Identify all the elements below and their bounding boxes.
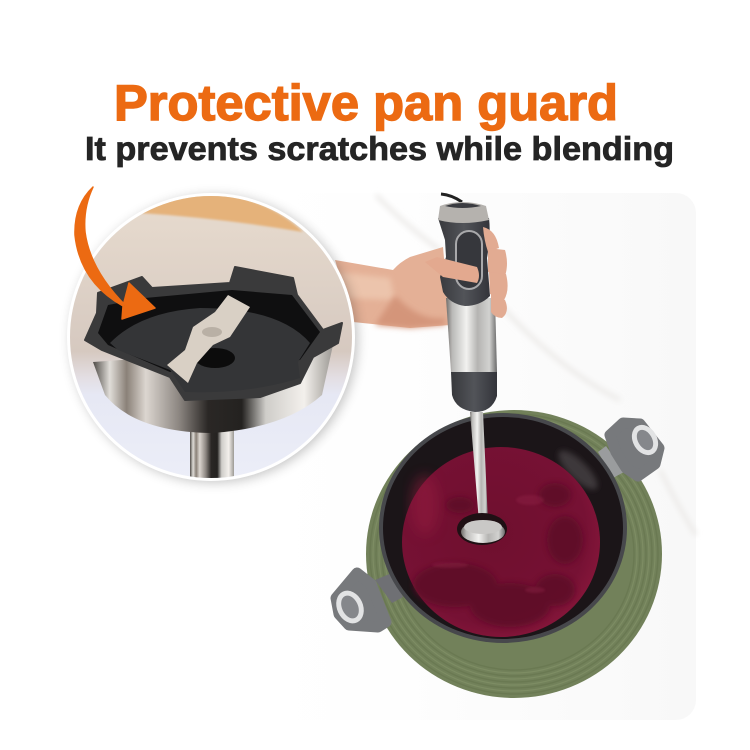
hand [335, 247, 450, 328]
placemat [366, 410, 662, 698]
chrome cup [93, 345, 333, 433]
orange shelf [142, 196, 303, 233]
top cap [438, 202, 489, 223]
shaft [470, 412, 488, 522]
blade [167, 295, 250, 383]
inset photo [66, 190, 356, 485]
blade rivet [202, 327, 222, 337]
guard outer rim [85, 267, 342, 400]
pan handle right [598, 420, 663, 478]
centre hole [195, 348, 235, 368]
marble veins [376, 195, 696, 535]
title: Protective pan guard [114, 75, 618, 131]
panel: photo of blender in pan [262, 193, 696, 720]
panel background [262, 193, 696, 720]
foot [457, 513, 507, 545]
steel body [446, 298, 497, 372]
fingers [483, 227, 508, 318]
soup [402, 447, 600, 637]
cord [441, 194, 462, 202]
guard floor [110, 308, 310, 372]
circle shadow [71, 196, 357, 482]
power button [456, 231, 482, 289]
pan [379, 413, 627, 643]
shaft [190, 430, 234, 478]
inset circle: pan guard close-up [66, 190, 357, 485]
grip [438, 218, 490, 306]
pan handle left [331, 573, 403, 628]
lower collar [451, 372, 497, 412]
guard inner wall [98, 290, 320, 372]
subtitle: It prevents scratches while blending [85, 130, 674, 167]
circle border [67, 193, 355, 481]
immersion blender [425, 194, 508, 545]
arrow [75, 187, 155, 319]
thumb [425, 257, 479, 283]
